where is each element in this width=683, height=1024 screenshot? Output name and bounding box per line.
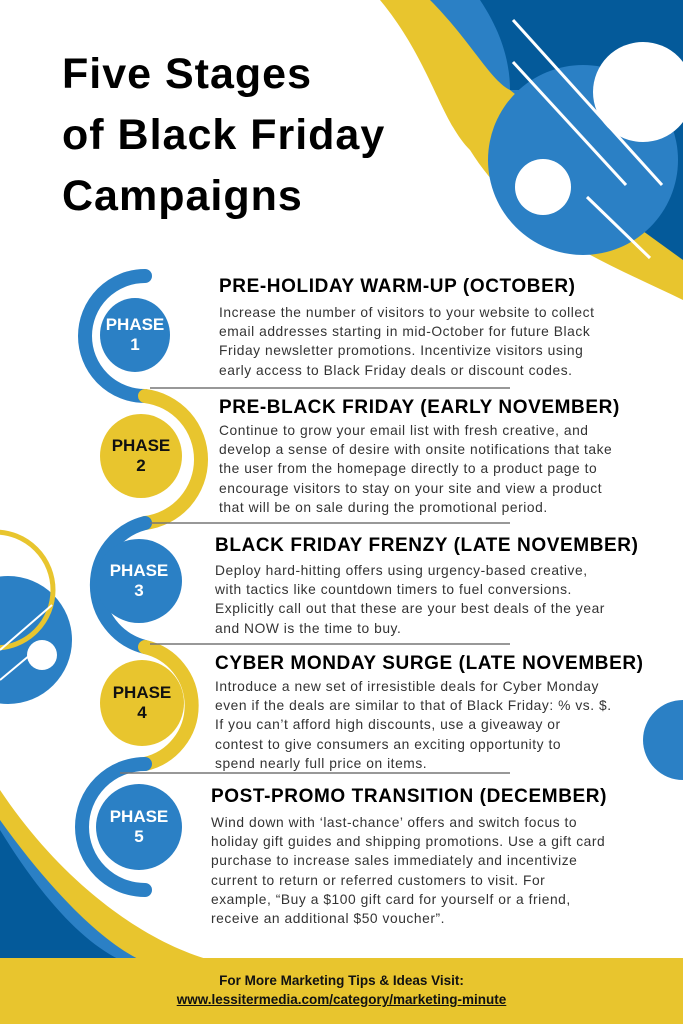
text 2 (219, 423, 612, 515)
text 3: Explicitly call out that these are your best deals of the year (215, 601, 605, 616)
text 2: develop a sense of desire with onsite notifications that take (219, 442, 612, 457)
title: of Black Friday (62, 111, 385, 159)
text 5: current to return or referred customers to visit. For (211, 873, 545, 888)
footer (0, 958, 683, 1024)
text 2: Continue to grow your email list with fresh creative, and (219, 423, 589, 438)
phase 4 circle: PHASE (113, 683, 171, 702)
heading 2: PRE-BLACK FRIDAY (EARLY NOVEMBER) (219, 397, 620, 418)
title: Campaigns (62, 172, 303, 220)
phase 2 circle (100, 414, 182, 498)
footer: For More Marketing Tips & Ideas Visit: (219, 973, 464, 988)
title: Five Stages (62, 50, 312, 98)
text 4: If you can’t afford high discounts, use a giveaway or (215, 717, 561, 732)
phase 5 circle: 5 (134, 827, 144, 846)
phase 5 circle (96, 784, 182, 870)
phase 2 circle: PHASE (112, 436, 170, 455)
text 4: spend nearly full price on items. (215, 756, 427, 771)
text 4: contest to give consumers an exciting opportunity to (215, 737, 561, 752)
heading 1: PRE-HOLIDAY WARM-UP (OCTOBER) (219, 276, 576, 297)
phase 2 circle: 2 (136, 456, 146, 475)
footer: www.lessitermedia.com/category/marketing-minute (177, 992, 506, 1007)
heading 5: POST-PROMO TRANSITION (DECEMBER) (211, 786, 607, 807)
text 5: purchase to increase sales immediately and incentivize (211, 853, 577, 868)
heading 4: CYBER MONDAY SURGE (LATE NOVEMBER) (215, 653, 644, 674)
text 1: email addresses starting in mid-October for future Black (219, 324, 590, 339)
phase 4 circle: 4 (137, 703, 147, 722)
text 2: the user from the homepage directly to a product page to (219, 461, 597, 476)
text 2: encourage visitors to stay on your site and view a product (219, 481, 602, 496)
text 5 (211, 815, 605, 926)
text 5: Wind down with ‘last-chance’ offers and switch focus to (211, 815, 577, 830)
text 4: Introduce a new set of irresistible deals for Cyber Monday (215, 679, 599, 694)
text 1: early access to Black Friday deals or discount codes. (219, 363, 573, 378)
text 2: that will be on sale during the promotional period. (219, 500, 548, 515)
phase 4 circle (100, 660, 184, 746)
text 5: holiday gift guides and shipping promotions. Use a gift card (211, 834, 605, 849)
phase 3 circle: PHASE (110, 561, 168, 580)
heading 3: BLACK FRIDAY FRENZY (LATE NOVEMBER) (215, 535, 639, 556)
title (62, 50, 385, 220)
text 5: example, “Buy a $100 gift card for yourself or a friend, (211, 892, 571, 907)
text 1: Increase the number of visitors to your website to collect (219, 305, 594, 320)
text 3: with tactics like countdown timers to fuel conversions. (215, 582, 572, 597)
phase 3 circle: 3 (134, 581, 144, 600)
phase 3 circle (96, 539, 182, 623)
text 3: Deploy hard-hitting offers using urgency-based creative, (215, 563, 588, 578)
text 1: Friday newsletter promotions. Incentivize visitors using (219, 343, 583, 358)
text 4 (215, 679, 612, 771)
phase 1 circle (100, 298, 170, 372)
text 3 (215, 563, 605, 636)
text 1 (219, 305, 594, 378)
text 5: receive an additional $50 voucher”. (211, 911, 445, 926)
phase 1 circle: 1 (130, 335, 140, 354)
text 3: and NOW is the time to buy. (215, 621, 401, 636)
phase 1 circle: PHASE (106, 315, 164, 334)
text 4: even if the deals are similar to that of Black Friday: % vs. $. (215, 698, 612, 713)
phase 5 circle: PHASE (110, 807, 168, 826)
